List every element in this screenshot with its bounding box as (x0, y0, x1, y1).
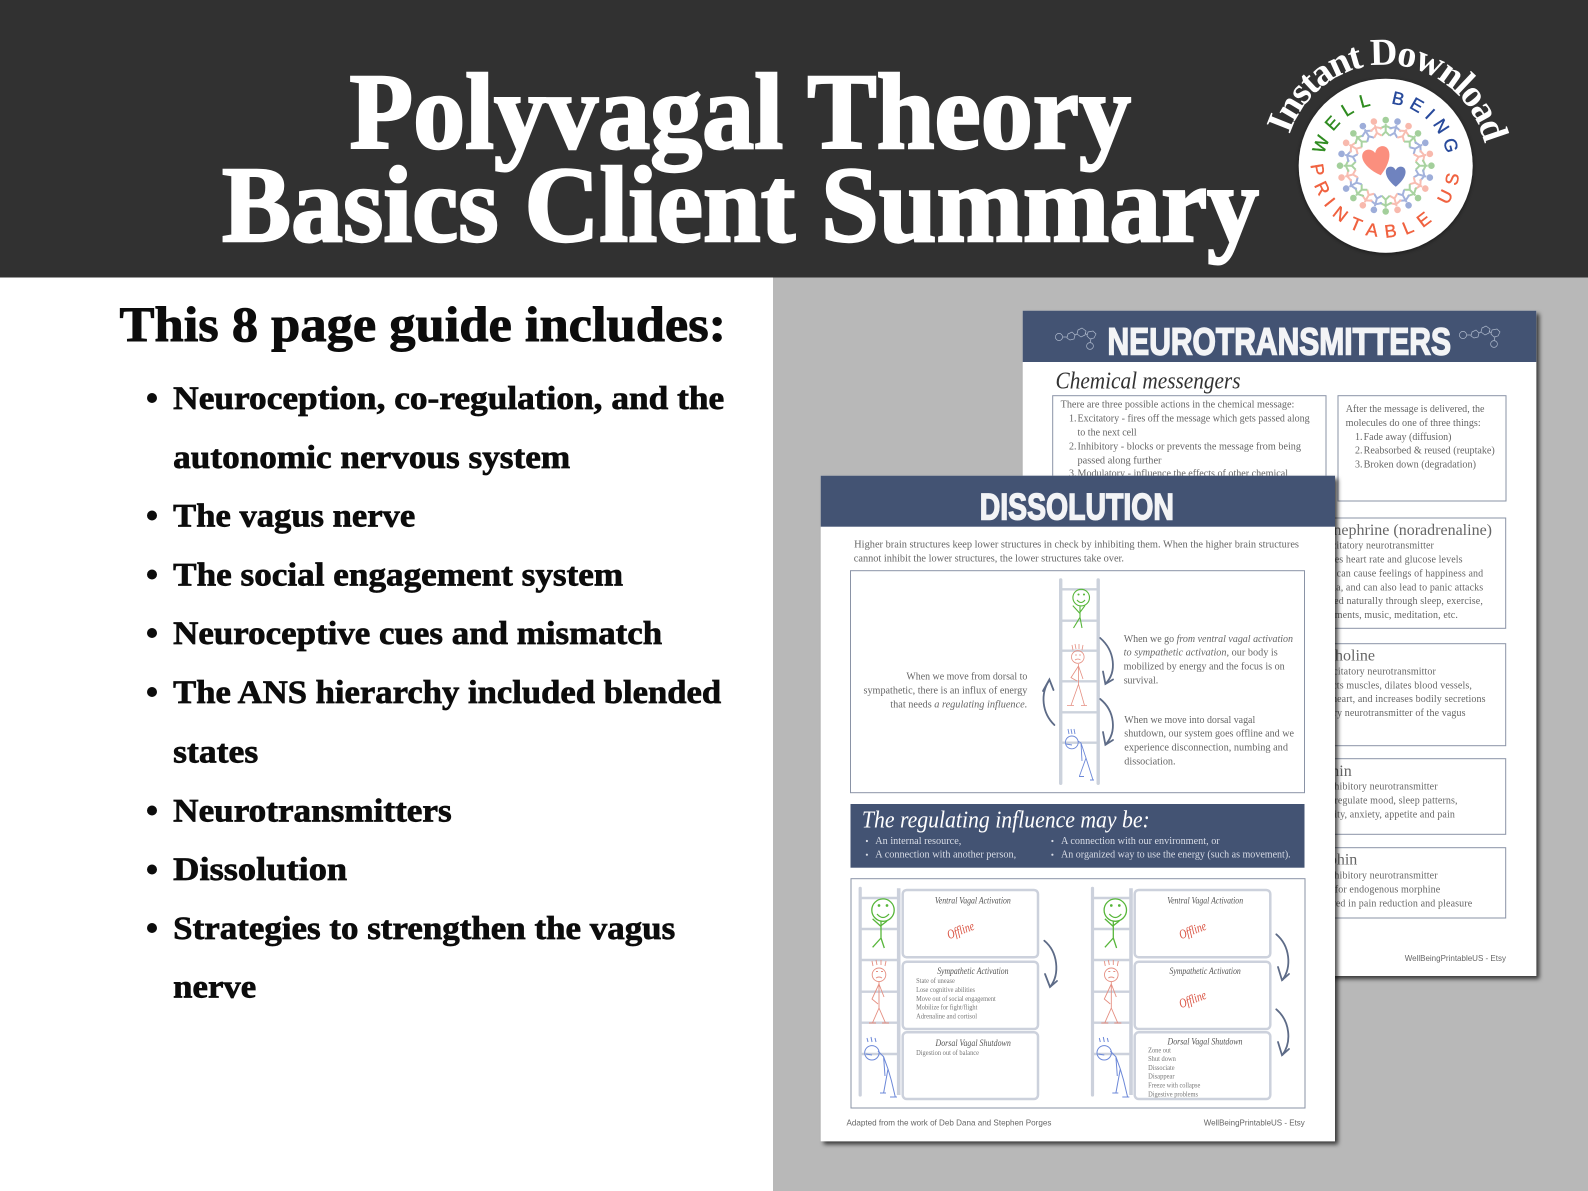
text: dorsal shutdown: shutdown, our system goes offline and we (1124, 729, 1295, 740)
bullet list: autonomic nervous system (173, 440, 570, 476)
footer: etsy credit: WellBeingPrintableUS - Etsy (1405, 954, 1507, 963)
cards: left column: Lose cognitive abilities (916, 986, 975, 994)
box: endorphin: Endorphin (1290, 851, 1357, 868)
badge: instant download logo (1266, 40, 1510, 254)
cards: right column: Sympathetic Activation (1170, 967, 1241, 977)
box: possible actions: Inhibitory - blocks or prevents the message from being (1078, 441, 1301, 452)
box: after the message: Reabsorbed & reused (reuptake) (1364, 446, 1495, 457)
bullet list: Neurotransmitters (173, 793, 452, 829)
box: serotonin: sexuality, anxiety, appetite and pain (1308, 810, 1455, 821)
box: possible actions: passed along further (1078, 455, 1162, 466)
ladder and figures: left (860, 888, 899, 1097)
text: ventral to sympathetic: When we go from ventral vagal activation (1124, 634, 1293, 645)
bullet list: nerve (173, 970, 256, 1006)
cards: left column: Adrenaline and cortisol (916, 1013, 977, 1021)
box: serotonin: Inhibitory neurotransmitter (1326, 782, 1438, 793)
intro text: Higher brain structures keep lower structures in check by inhibiting them. When the higher brain structures (854, 540, 1299, 551)
bullets: regulating influences (866, 836, 1291, 861)
text: ventral to sympathetic: to sympathetic activation, our body is (1124, 648, 1278, 659)
header banner (0, 0, 1588, 278)
box: possible actions: 3. (1069, 469, 1076, 480)
text: dorsal to sympathetic: that needs a regulating influence. (890, 699, 1027, 710)
cards: right column: Dorsal Vagal Shutdown (1167, 1037, 1243, 1047)
text: dorsal to sympathetic: sympathetic, there is an influx of energy (864, 685, 1027, 696)
heading: dissolution: DISSOLUTION (980, 487, 1174, 528)
box: norepinephrine: Increases heart rate and glucose levels (1305, 554, 1463, 565)
logo circle: WELL (1312, 95, 1371, 152)
text: dorsal to sympathetic: When we move from dorsal to (906, 672, 1027, 683)
box: norepinephrine: Increased naturally through sleep, exercise, (1304, 596, 1483, 607)
ring of people (1337, 117, 1435, 215)
box: serotonin (1289, 759, 1506, 834)
icon: molecule left (1055, 328, 1096, 349)
heading: guide includes: This 8 page guide includes: (120, 296, 726, 352)
bullets: regulating influences: An organized way to use the energy (such as movement). (1061, 850, 1291, 861)
box: norepinephrine: euphoria, and can also lead to panic attacks (1305, 582, 1483, 593)
box: endorphin: Short for endogenous morphine (1310, 885, 1441, 896)
subheading: regulating influence: The regulating influence may be: (862, 807, 1150, 833)
panel: regulating influence (850, 804, 1304, 868)
box: serotonin: Serotonin (1289, 763, 1352, 780)
text: dorsal shutdown: When we move into dorsal vagal (1124, 715, 1255, 726)
logo circle: BEING (1392, 91, 1458, 152)
panel: neurotransmitters page (1023, 311, 1536, 976)
figure: blue dorsal (1065, 729, 1094, 780)
bullet list: The ANS hierarchy included blended (173, 675, 721, 711)
cards: left column (903, 890, 1038, 1099)
box: possible actions: There are three possible actions in the chemical message: (1061, 400, 1294, 411)
text: dorsal shutdown: dissociation. (1124, 757, 1176, 768)
box: norepinephrine: Excitatory neurotransmitter (1321, 541, 1435, 552)
box: possible actions: Modulatory - influence the effects of other chemical (1078, 469, 1288, 480)
footer: etsy credit: WellBeingPrintableUS - Etsy (1204, 1118, 1306, 1127)
text: ventral to sympathetic: survival. (1124, 675, 1158, 686)
cards: left column: Dorsal Vagal Shutdown (935, 1039, 1011, 1049)
box: acetylcholine: Acetylcholine (1285, 647, 1375, 664)
cards: left column: Ventral Vagal Activation (935, 896, 1011, 906)
title: Polyvagal Theory (350, 53, 1131, 172)
figure: green ventral (1073, 589, 1089, 628)
arrow: sympathetic to dorsal (1100, 699, 1113, 745)
panel: gray preview area (773, 277, 1588, 1191)
box: acetylcholine: Contracts muscles, dilates blood vessels, (1304, 680, 1472, 691)
bullet list: Dissolution (173, 852, 347, 888)
box: endorphin (1290, 848, 1506, 918)
box: after the message: 2. (1355, 446, 1362, 457)
cards: left column: Sympathetic Activation (937, 967, 1009, 977)
box: after the message: After the message is delivered, the (1346, 404, 1485, 415)
icon: molecule right (1459, 326, 1500, 347)
text: dorsal shutdown (1124, 715, 1295, 768)
box: acetylcholine: Primary neurotransmitter of the vagus (1309, 708, 1466, 719)
intro text: cannot inhibit the lower structures, the lower structures take over. (854, 554, 1124, 565)
cards: right column: Digestive problems (1148, 1091, 1198, 1099)
cards: right column: Dissociate (1148, 1064, 1175, 1072)
box: ladder diagram (850, 571, 1304, 793)
box: state comparison diagrams (851, 879, 1305, 1108)
cards: left column: Digestion out of balance (916, 1049, 979, 1057)
arrow: right diagram upper (1276, 934, 1289, 980)
page banner (821, 476, 1335, 527)
box: possible actions: to the next cell (1078, 428, 1137, 439)
logo circle (1298, 78, 1474, 254)
box: after the message (1338, 396, 1506, 501)
box: norepinephrine (1289, 518, 1506, 628)
cards: right column: Shut down (1148, 1055, 1176, 1063)
page banner (1023, 311, 1536, 362)
cards: right column (1135, 890, 1270, 1099)
cards: left column: Move out of social engagement (916, 995, 996, 1003)
title (222, 53, 1259, 265)
figure: red sympathetic (1067, 644, 1087, 706)
bullets: regulating influences: A connection with another person, (875, 850, 1016, 861)
box: after the message: molecules do one of three things: (1346, 418, 1481, 429)
box: after the message: 3. (1355, 460, 1362, 471)
bullet list: The vagus nerve (173, 499, 415, 535)
bullets: regulating influences: An internal resource, (875, 836, 961, 847)
box: acetylcholine: Excitatory neurotransmittor (1322, 666, 1437, 677)
ladder and figures: right (1092, 888, 1131, 1097)
box: endorphin: Involved in pain reduction and pleasure (1309, 898, 1473, 909)
intro text (854, 540, 1299, 565)
box: after the message: 1. (1355, 432, 1362, 443)
arrow: left diagram (1044, 941, 1057, 987)
box: after the message: Fade away (diffusion) (1364, 432, 1452, 443)
box: norepinephrine: supplements, music, meditation, etc. (1308, 610, 1458, 621)
cards: right column: Disappear (1148, 1073, 1175, 1081)
cards: left column: State of unease (916, 977, 955, 985)
box: serotonin: Helps regulate mood, sleep patterns, (1308, 796, 1458, 807)
box: possible actions: 1. (1069, 414, 1076, 425)
bullet list: The social engagement system (173, 557, 623, 593)
box: norepinephrine: Too much can cause feelings of happiness and (1293, 568, 1483, 579)
box: possible actions: Excitatory - fires off the message which gets passed along (1078, 414, 1310, 425)
bullet list: Strategies to strengthen the vagus (173, 911, 675, 947)
bullet list (147, 381, 724, 1006)
box: possible actions: 2. (1069, 441, 1076, 452)
cards: left column: Offline (945, 918, 976, 942)
subheading: chemical messengers: Chemical messengers (1056, 368, 1240, 394)
cards: right column: Offline (1177, 918, 1208, 942)
title: Basics Client Summary (222, 146, 1259, 265)
cards: right column: Ventral Vagal Activation (1167, 896, 1243, 906)
box: possible actions (1053, 396, 1326, 501)
cards: right column: Offline (1177, 987, 1208, 1011)
footer: attribution: Adapted from the work of Deb Dana and Stephen Porges (846, 1118, 1051, 1127)
arrow: right diagram lower (1276, 1009, 1289, 1055)
cards: left column: Mobilize for fight/flight (916, 1004, 977, 1012)
box: endorphin: Inhibitory neurotransmitter (1326, 871, 1438, 882)
box: acetylcholine: slows heart, and increases bodily secretions (1306, 694, 1486, 705)
panel: dissolution page (821, 476, 1335, 1141)
box: norepinephrine: Norepinephrine (noradrenaline) (1289, 522, 1492, 539)
heading: neurotransmitters: NEUROTRANSMITTERS (1108, 321, 1451, 363)
text: ventral to sympathetic (1124, 634, 1293, 686)
cards: right column: Freeze with collapse (1148, 1082, 1200, 1090)
bullet list: states (173, 735, 258, 771)
logo circle: PRINTABLE US (1310, 164, 1459, 238)
icon: hearts (1361, 145, 1406, 187)
text: dorsal to sympathetic (864, 672, 1027, 710)
text: dorsal shutdown: experience disconnection, numbing and (1124, 743, 1288, 754)
bullet list: Neuroception, co-regulation, and the (173, 381, 724, 417)
curved label: Instant Download: Instant Download (1266, 40, 1510, 144)
cards: right column: Zone out (1148, 1046, 1171, 1054)
text: ventral to sympathetic: mobilized by energy and the focus is on (1124, 662, 1285, 673)
box: after the message: Broken down (degradation) (1364, 460, 1476, 471)
bullets: regulating influences: A connection with our environment, or (1061, 836, 1220, 847)
bullet list: Neuroceptive cues and mismatch (173, 616, 662, 652)
arrow: dorsal to sympathetic (1043, 680, 1054, 725)
ladder (1061, 580, 1098, 783)
box: acetylcholine (1285, 644, 1506, 746)
arrow: ventral to sympathetic (1100, 638, 1113, 684)
